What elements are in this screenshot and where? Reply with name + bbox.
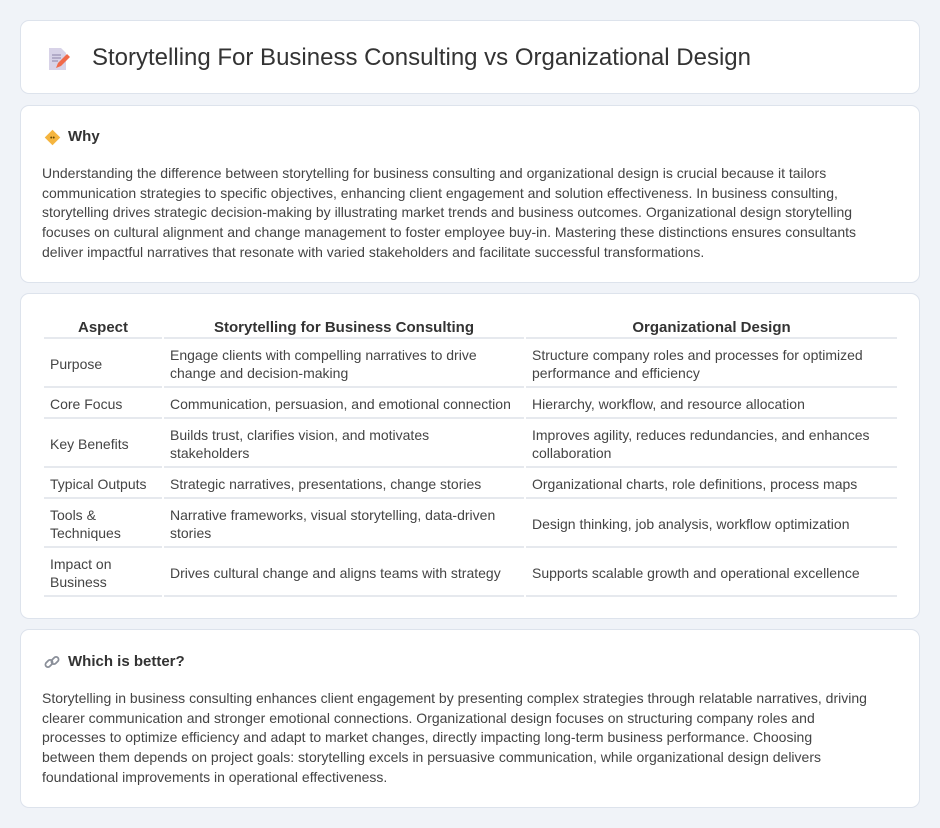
text: which is better: Storytelling in business consulting enhances client engagement by presenting complex strategies through relatable narratives, driving: [42, 690, 867, 706]
table: Core Focus: [50, 396, 122, 412]
table: Structure company roles and processes for optimized performance and efficiency: [532, 346, 863, 380]
title: Storytelling For Business Consulting vs Organizational Design: [92, 44, 751, 71]
text: which is better: foundational improvements in operational effectiveness.: [42, 769, 387, 785]
table: Design thinking, job analysis, workflow optimization: [532, 516, 849, 532]
table: Strategic narratives, presentations, change stories: [170, 476, 481, 492]
table: Aspect: [78, 319, 128, 336]
table: Typical Outputs: [50, 476, 146, 492]
table: stakeholders: [170, 444, 249, 460]
panel: comparison table: [20, 293, 920, 619]
table: Engage clients with compelling narratives to drive change and decision-making: [170, 346, 477, 380]
panel: why: [20, 105, 920, 283]
table: Communication, persuasion, and emotional connection: [170, 396, 511, 412]
heading: which is better: Which is better?: [68, 653, 185, 670]
table: Purpose: [50, 356, 102, 372]
table: Tools & Techniques: [50, 506, 121, 540]
icon: link: [44, 656, 60, 668]
table: Impact on Business: [50, 556, 111, 590]
text: which is better: [42, 690, 867, 785]
table: Narrative frameworks, visual storytelling, data-driven stories: [170, 506, 495, 540]
table: Improves agility, reduces redundancies, and enhances collaboration: [532, 426, 870, 460]
icon: diamond sign: ••: [50, 135, 55, 142]
table: Hierarchy, workflow, and resource allocation: [532, 396, 805, 412]
icon: diamond sign: [44, 130, 60, 146]
table: Storytelling for Business Consulting: [214, 319, 474, 336]
table: Organizational charts, role definitions, process maps: [532, 476, 857, 492]
table: Organizational Design: [632, 319, 791, 336]
text: which is better: between them depends on project goals: storytelling excels in persuasive communication, while organizational design delivers: [42, 749, 821, 765]
table: Drives cultural change and aligns teams with strategy: [170, 564, 501, 580]
table: Key Benefits: [50, 436, 129, 452]
header card: [20, 20, 920, 94]
text: which is better: processes to optimize efficiency and adapt to market changes, directly impacting long-term business performance. Choosing: [42, 729, 812, 745]
text: which is better: clearer communication and stronger emotional connections. Organizational design focuses on structuring company roles and: [42, 710, 815, 726]
icon: document with pencil: [49, 48, 70, 70]
table: [44, 319, 897, 597]
table: Builds trust, clarifies vision, and motivates: [170, 426, 429, 442]
table: Supports scalable growth and operational excellence: [532, 564, 860, 580]
text: why: Understanding the difference between storytelling for business consulting and organizational design is crucial because it tailors communication strategies to specific objectives, enhancing client engagement and solution effectiveness. In business consulting, storytelling drives strategic decision-making by illustrating market trends and business outcomes. Organizational design storytelling focuses on cultural alignment and change management to foster employee buy-in. Mastering these distinctions ensures consultants deliver impactful narratives that resonate with varied stakeholders and facilitate successful transformations.: [42, 165, 856, 260]
heading: why: Why: [68, 128, 100, 145]
panel: which is better: [20, 629, 920, 808]
